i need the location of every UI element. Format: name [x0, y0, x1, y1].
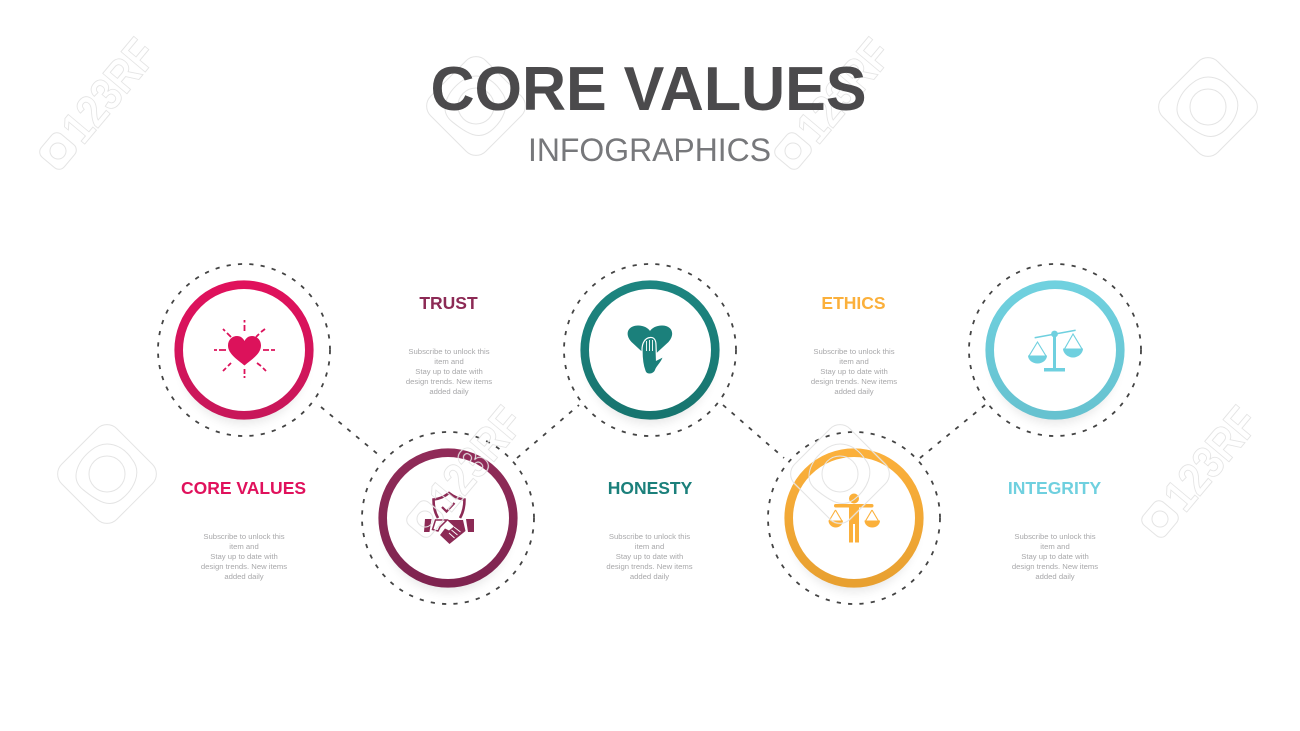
text block: ethics: Stay up to date with	[820, 367, 888, 376]
watermark: centre logo: 123RF	[418, 397, 534, 520]
panel: honesty circle	[564, 264, 736, 436]
text block: trust: TRUST	[419, 293, 478, 313]
panel: trust circle	[362, 432, 534, 604]
text block: ethics: item and	[839, 357, 869, 366]
text block: core values: design trends. New items	[201, 562, 287, 571]
text block: honesty: item and	[635, 542, 664, 551]
icon: heart and raised hand	[628, 326, 672, 374]
text block: core values: Stay up to date with	[210, 552, 278, 561]
watermark: lower right logo	[1130, 397, 1269, 547]
connector: honesty to ethics	[723, 405, 784, 458]
text block: integrity: design trends. New items	[1012, 562, 1098, 571]
text block: trust: design trends. New items	[406, 377, 492, 386]
watermark: top centre-right logo	[763, 29, 902, 179]
icon: shield and handshake	[424, 493, 474, 544]
text block: ethics: Subscribe to unlock this	[813, 347, 895, 356]
subtitle: INFOGRAPHICS	[528, 132, 771, 168]
watermark: top left logo: 123RF	[51, 29, 167, 152]
icon: balance scales	[1028, 330, 1083, 372]
icon: person balancing scales	[828, 494, 880, 542]
text block: integrity: INTEGRITY	[1008, 478, 1101, 498]
watermark: centre logo: 123RF	[418, 397, 534, 520]
text block: honesty: design trends. New items	[606, 562, 693, 571]
text block: core values: Subscribe to unlock this	[203, 532, 285, 541]
text block: trust: item and	[434, 357, 464, 366]
text block: core values: CORE VALUES	[181, 478, 306, 498]
panel: integrity circle	[969, 264, 1141, 436]
watermark: lower centre-right emblem	[785, 419, 895, 529]
connector: trust to honesty	[517, 405, 579, 458]
watermark: top centre-right logo: 123RF	[786, 29, 902, 152]
icon: glowing heart	[214, 320, 275, 378]
watermark: lower right logo: 123RF	[1153, 397, 1269, 520]
text block: core values: item and	[229, 542, 259, 551]
watermark: top left logo	[28, 29, 167, 179]
text block: integrity: added daily	[1035, 572, 1075, 581]
text block: integrity: Stay up to date with	[1021, 552, 1089, 561]
text block: trust: Stay up to date with	[415, 367, 483, 376]
watermark: top right emblem	[1153, 52, 1263, 162]
title: CORE VALUES	[430, 55, 866, 124]
text block: honesty: HONESTY	[608, 478, 693, 498]
watermark: centre logo	[395, 397, 534, 547]
watermark: top centre emblem	[421, 51, 531, 161]
text block: ethics: design trends. New items	[811, 377, 897, 386]
watermark: left emblem	[52, 419, 162, 529]
text block: trust: Subscribe to unlock this	[408, 347, 490, 356]
text block: core values: added daily	[224, 572, 264, 581]
text block: honesty: Subscribe to unlock this	[609, 532, 690, 541]
text block: honesty	[606, 478, 693, 581]
text block: ethics	[811, 293, 897, 396]
text block: honesty: added daily	[630, 572, 669, 581]
text block: trust: added daily	[429, 387, 469, 396]
connector: core values to trust	[321, 407, 380, 456]
text block: trust	[406, 293, 492, 396]
panel: core values circle	[158, 264, 330, 436]
text block: ethics: added daily	[834, 387, 874, 396]
text block: ethics: ETHICS	[821, 293, 886, 313]
text block: integrity: item and	[1040, 542, 1070, 551]
panel: ethics circle	[768, 432, 940, 604]
text block: integrity: Subscribe to unlock this	[1014, 532, 1096, 541]
connector: ethics to integrity	[920, 405, 985, 458]
text block: honesty: Stay up to date with	[616, 552, 683, 561]
text block: integrity	[1008, 478, 1101, 581]
text block: core values	[181, 478, 306, 581]
